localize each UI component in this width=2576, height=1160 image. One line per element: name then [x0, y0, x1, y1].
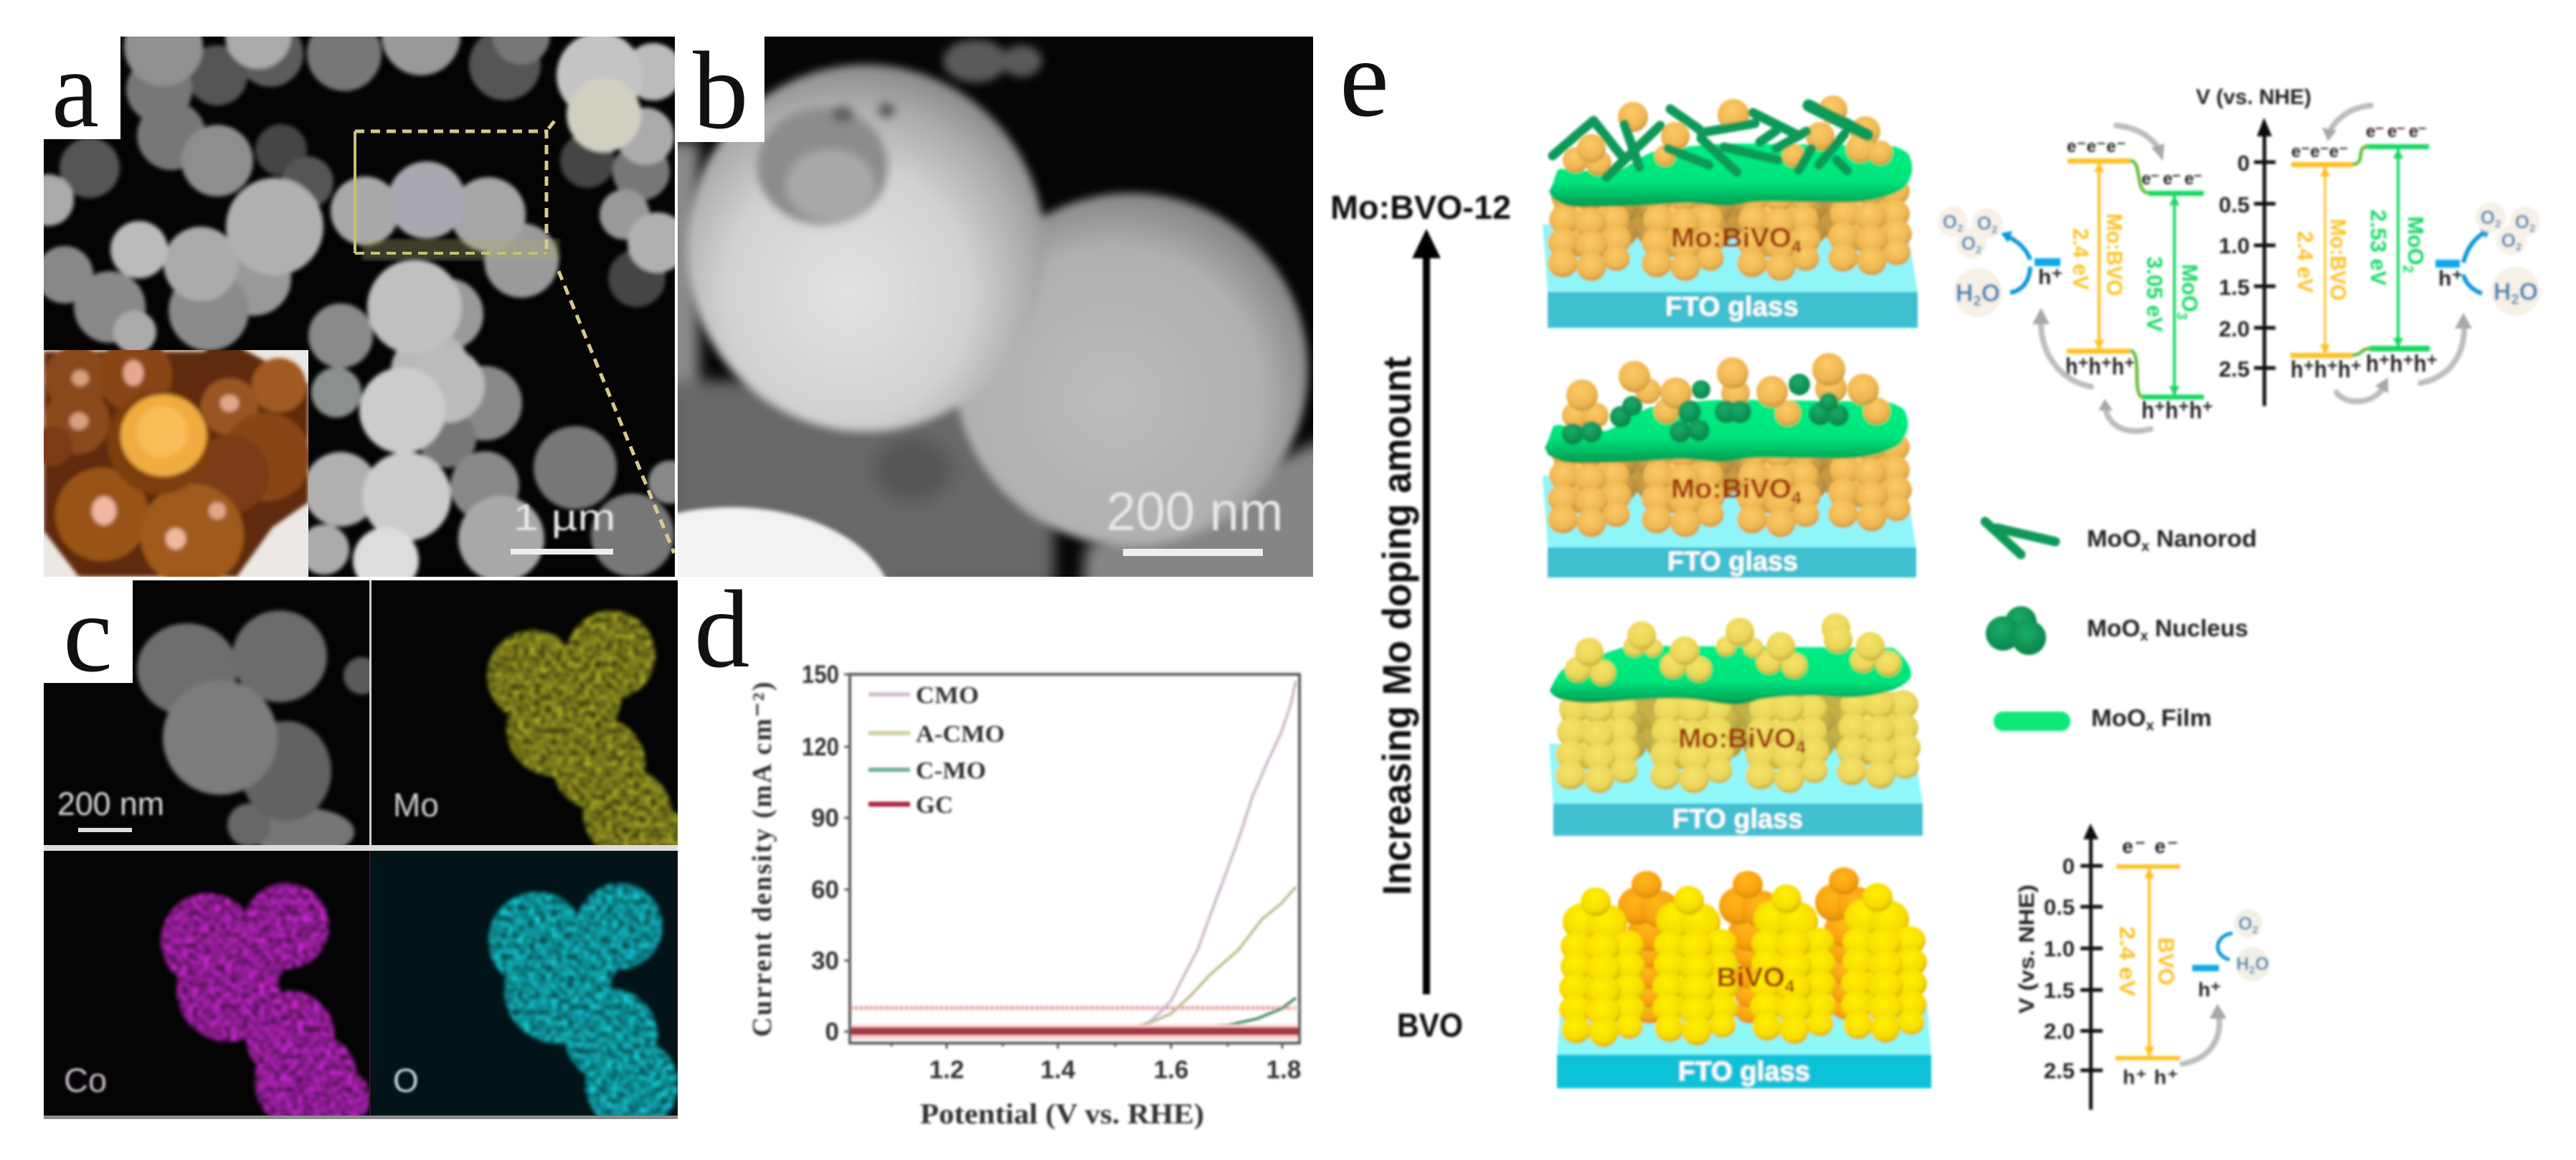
label: 4 [1791, 489, 1802, 508]
right pair: energy levels: h⁺h⁺h⁺ [2291, 356, 2362, 382]
label c [44, 572, 133, 695]
curve: GC [851, 1024, 1299, 1039]
legend item: nucleus: Nucleus [2149, 615, 2248, 641]
curve: CMO [1133, 681, 1296, 1027]
legend item: film: Film [2154, 704, 2212, 731]
band diagram: BVO [2015, 824, 2270, 1110]
left water oxidation: O [1981, 280, 2000, 307]
legend item: nucleus: x [2140, 628, 2149, 644]
MoOx nanorods [1553, 105, 1867, 177]
potential axis: V (vs. NHE) [2196, 85, 2311, 109]
energy levels and gap: BVO [2154, 937, 2179, 986]
left water oxidation: H [1956, 280, 1973, 307]
water oxidation: H [2236, 954, 2249, 974]
y-axis tick labels: 60 [811, 876, 839, 904]
particles above film [1565, 613, 1901, 686]
label: Mo:BiVO [1671, 223, 1786, 253]
left pair: energy levels: MoO [2177, 264, 2202, 313]
label a [44, 37, 120, 139]
yellow front columns [1559, 883, 1927, 1047]
water oxidation [2192, 909, 2270, 1001]
panel e: Mo doping axis arrow with labels [1330, 189, 1511, 1044]
right water oxidation: O [2519, 278, 2538, 306]
label: 4 [1791, 237, 1802, 257]
left pair: energy levels: 3 [2174, 312, 2189, 320]
label: Mo:BiVO [1678, 724, 1793, 754]
water oxidation: O [2255, 954, 2269, 974]
MoOx film [1550, 646, 1911, 704]
right pair: energy levels: h⁺h⁺h⁺ [2366, 350, 2438, 377]
structure: MoOx nuclei on film [1543, 353, 1916, 577]
legend item: nanorod: Nanorod [2149, 525, 2257, 552]
legend item: nanorod [1985, 522, 2257, 555]
y-axis tick labels: 0 [825, 1018, 839, 1046]
structure: thin MoOx film [1549, 613, 1923, 836]
map: Mo [393, 610, 688, 858]
right water oxidation: O [2501, 230, 2516, 251]
right pair: energy levels: e⁻e⁻e⁻ [2291, 142, 2348, 161]
potential axis: 0 [2238, 151, 2250, 176]
x-axis tick labels: 1.4 [1041, 1056, 1076, 1084]
right water oxidation: H [2494, 278, 2511, 306]
legend: GC [916, 792, 953, 819]
label a: a [52, 27, 99, 151]
orange back columns [1618, 867, 1876, 1024]
panel d: current density vs potential chart [747, 661, 1301, 1130]
right pair: energy levels: 2 [2400, 265, 2415, 273]
MoOx film [1549, 143, 1912, 207]
water oxidation: 2 [2249, 964, 2255, 976]
scale bar: 1 µm [511, 502, 614, 555]
potential axis [2015, 824, 2103, 1110]
right pair: energy levels: 2.53 eV [2366, 209, 2391, 286]
x-axis tick labels: 1.8 [1266, 1056, 1301, 1084]
right water oxidation [2435, 202, 2540, 316]
SEM spheres [44, 37, 675, 577]
right pair: energy levels: e⁻ e⁻ e⁻ [2366, 122, 2427, 141]
left water oxidation: O [1943, 211, 1957, 232]
panel a: SEM micrograph with chocolate inset [44, 37, 675, 577]
scale bar: 200 nm: 200 nm [1106, 481, 1284, 542]
right pair: energy levels [2291, 122, 2438, 382]
map: SEM image with scale bar: 200 nm [57, 786, 164, 822]
left water oxidation: 2 [1992, 224, 1997, 236]
potential axis: 0.5 [2219, 192, 2250, 217]
left water oxidation: 2 [1957, 222, 1963, 235]
map: Co: Co [64, 1061, 107, 1099]
energy levels and gap: 2.4 eV [2115, 926, 2140, 996]
label: BiVO [1717, 963, 1783, 993]
structure: Mo:BVO-12 with MoOx nanorods on film [1543, 95, 1918, 328]
axis title: Increasing Mo doping amount [1374, 357, 1419, 895]
legend item: nanorod: MoO [2087, 525, 2139, 552]
left pair: energy levels: h⁺h⁺h⁺ [2065, 353, 2135, 379]
label b [678, 37, 764, 142]
BiVO4 particle columns [1548, 176, 1912, 281]
FTO glass [1549, 744, 1923, 836]
legend item: film: x [2146, 718, 2154, 734]
potential axis: 2.5 [2044, 1058, 2075, 1083]
potential axis: 1.5 [2219, 275, 2250, 300]
y-axis tick labels [802, 661, 839, 1046]
water oxidation: h⁺ [2198, 979, 2221, 1001]
right water oxidation: O [2515, 211, 2529, 232]
FTO glass [1543, 473, 1916, 577]
right water oxidation: O [2481, 207, 2495, 228]
left water oxidation [1938, 207, 2063, 317]
particles above film [1562, 353, 1890, 428]
right water oxidation: 2 [2529, 222, 2535, 235]
x-axis title: Potential (V vs. RHE) [920, 1098, 1204, 1130]
label: 4 [1796, 738, 1806, 758]
legend: C-MO [916, 758, 986, 784]
reference line at 10 mA cm-2 [850, 1006, 1299, 1010]
FTO glass: FTO glass [1678, 1057, 1810, 1087]
structure: pristine BVO [1557, 867, 1931, 1088]
MoOx nuclei [1562, 374, 1849, 445]
right water oxidation: 2 [2511, 292, 2519, 308]
label: 4 [1785, 977, 1795, 996]
x-axis tick labels [929, 1056, 1301, 1084]
FTO glass [1543, 222, 1918, 328]
curve: A-CMO [1133, 887, 1296, 1027]
panel e label: e [1340, 16, 1389, 140]
right water oxidation: 2 [2516, 241, 2521, 253]
inset: chocolate balls photo [44, 350, 308, 577]
legend item: nanorod: x [2141, 539, 2149, 555]
legend item: nucleus: MoO [2087, 615, 2139, 641]
right pair: energy levels: MoO [2403, 217, 2428, 265]
left water oxidation: O [1961, 232, 1976, 254]
left water oxidation: 2 [1973, 293, 1981, 309]
potential axis: 2.5 [2219, 357, 2250, 382]
potential axis: 1.0 [2219, 233, 2250, 258]
legend: MoOx morphologies [1985, 522, 2257, 734]
y-axis tick labels: 120 [802, 733, 839, 761]
y-axis title: Current density (mA cm⁻²) [747, 682, 777, 1037]
scale bar: 1 µm: 1 µm [513, 497, 615, 539]
panel c: elemental mapping [44, 572, 688, 1133]
dashed selection box and zoom line [355, 121, 674, 553]
BiVO4 particle columns [1548, 433, 1912, 537]
left pair: energy levels: 3.05 eV [2142, 257, 2167, 332]
potential axis: 1.5 [2044, 978, 2075, 1003]
panel d label: d [694, 567, 750, 691]
potential axis [2196, 85, 2311, 406]
gray charge transfer arrows [2041, 105, 2464, 431]
energy levels and gap [2115, 835, 2180, 1088]
FTO glass: FTO glass [1672, 804, 1803, 834]
legend [868, 682, 1005, 819]
particles above film [1563, 95, 1893, 176]
left water oxidation: 2 [1976, 244, 1981, 256]
legend: A-CMO [916, 721, 1005, 748]
potential axis: 2.0 [2044, 1019, 2075, 1044]
label: Mo:BiVO [1671, 474, 1786, 504]
legend: CMO [916, 682, 979, 709]
water oxidation: 2 [2253, 924, 2258, 936]
map: SEM image with scale bar [57, 610, 381, 857]
potential axis: 1.0 [2044, 936, 2075, 961]
y-axis tick labels: 90 [811, 804, 839, 832]
panel b: close-up SEM of two spheres [678, 37, 1313, 577]
FTO glass: FTO glass [1667, 547, 1798, 577]
potential axis: 0.5 [2044, 895, 2075, 920]
right water oxidation: 2 [2495, 218, 2501, 230]
left pair: energy levels: 2.4 eV [2068, 228, 2093, 290]
arrow [1412, 229, 1441, 994]
top label: Mo:BVO-12 [1330, 189, 1511, 226]
y-axis tick labels: 150 [802, 661, 839, 689]
legend item: film [1994, 704, 2212, 734]
left pair: energy levels: h⁺h⁺h⁺ [2141, 397, 2213, 423]
energy levels and gap: h⁺ h⁺ [2123, 1066, 2178, 1088]
water oxidation: O [2238, 914, 2253, 934]
left pair: energy levels: e⁻ e⁻ e⁻ [2141, 169, 2202, 189]
x-axis tick labels: 1.6 [1154, 1056, 1188, 1084]
MoOx film [1545, 400, 1908, 463]
legend item: nucleus [1986, 606, 2248, 655]
left pair: energy levels: Mo:BVO [2102, 214, 2127, 296]
label b: b [693, 29, 749, 152]
energy levels and gap: e⁻ e⁻ [2122, 835, 2178, 857]
right pair: energy levels: Mo:BVO [2326, 219, 2351, 301]
scale bar: 200 nm [1107, 491, 1281, 556]
curve: C-MO [1198, 998, 1296, 1027]
band diagram: Mo:BVO / MoO3 and Mo:BVO / MoO2 [1938, 85, 2540, 431]
label c: c [63, 572, 113, 695]
map: O: O [393, 1062, 419, 1099]
x-axis tick labels: 1.2 [929, 1056, 964, 1084]
potential axis: V (vs. NHE) [2015, 885, 2039, 1014]
left water oxidation: O [1977, 212, 1992, 234]
left water oxidation: h⁺ [2038, 265, 2063, 289]
bottom label: BVO [1397, 1006, 1463, 1044]
gray charge transfer arrow [2182, 1004, 2227, 1064]
map: O [371, 851, 678, 1131]
legend item: film: MoO [2091, 704, 2144, 731]
y-axis tick labels: 30 [811, 947, 839, 975]
potential axis: 2.0 [2219, 316, 2250, 341]
left pair: energy levels: e⁻e⁻e⁻ [2067, 137, 2126, 156]
FTO glass [1557, 1001, 1931, 1088]
BiVO4 particle columns [1555, 690, 1921, 793]
left pair: energy levels [2065, 137, 2213, 423]
plot frame and ticks [844, 674, 1299, 1049]
potential axis: 0 [2063, 854, 2075, 879]
FTO glass: FTO glass [1665, 292, 1799, 322]
right water oxidation: h⁺ [2438, 267, 2463, 291]
right pair: energy levels: 2.4 eV [2293, 231, 2318, 293]
map: Mo: Mo [393, 786, 439, 824]
map: Co [64, 883, 371, 1133]
